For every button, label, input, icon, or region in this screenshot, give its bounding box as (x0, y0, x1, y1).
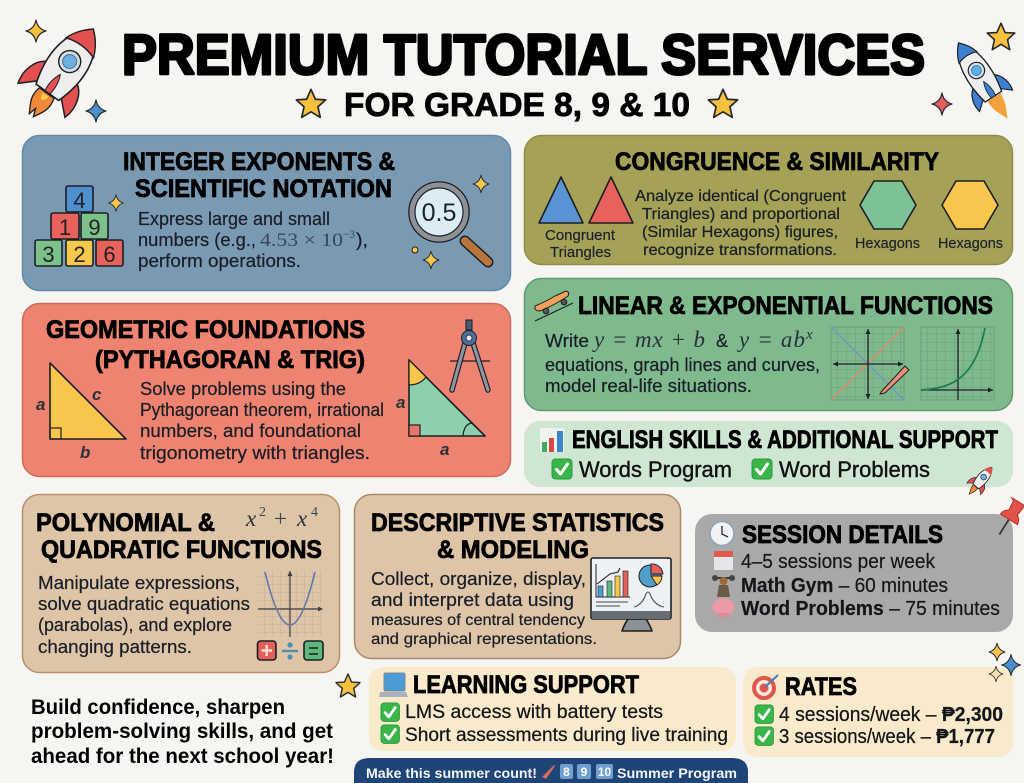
icon: push pin (991, 497, 1024, 540)
text: polynomial description: Manipulate expressions, (38, 573, 240, 593)
icon: rocket right (941, 32, 1024, 130)
text: congruence description: Analyze identical (Congruent (635, 188, 847, 205)
text: linear description: & (716, 331, 728, 351)
formula: x squared plus x to the fourth: 4 (311, 505, 318, 520)
text: congruence description: Triangles) and proportional (642, 206, 840, 223)
text: closing message: Build confidence, sharpen (31, 696, 285, 719)
text: linear description: y = mx + b (592, 327, 705, 352)
icon: congruent triangles (539, 177, 633, 261)
icon: bar chart (540, 428, 564, 452)
formula: x squared plus x to the fourth: x (296, 506, 308, 531)
heading: integer exponents: INTEGER EXPONENTS & (123, 148, 395, 176)
item: word problems time: Word Problems – 75 minutes (741, 598, 1000, 620)
chart: exponential graph (921, 327, 994, 400)
icon: computer monitor with charts (591, 558, 671, 631)
icon: subtitle star right (708, 89, 738, 117)
panel: polynomial and quadratic functions (22, 494, 340, 672)
heading: geometric foundations (46, 316, 365, 374)
banner: summer program: Summer Program (617, 765, 737, 781)
icon: green hexagon (855, 181, 920, 252)
icon: sparkle red right (932, 93, 952, 115)
icon: math operation symbols (258, 641, 323, 660)
icon: green hexagon: Hexagons (855, 235, 920, 252)
panel: english skills (524, 421, 1013, 500)
item: math gym: Math Gym – 60 minutes (741, 575, 948, 597)
item: short assessments: Short assessments during live training (405, 724, 728, 746)
panel: descriptive statistics (354, 494, 680, 658)
heading: descriptive statistics: DESCRIPTIVE STATISTICS (371, 509, 664, 537)
icon: subtitle star left (296, 89, 326, 117)
heading: descriptive statistics (371, 509, 664, 564)
icon: clock (710, 522, 734, 546)
text: closing message: problem-solving skills, and get (31, 720, 333, 743)
text: linear description: Write (545, 331, 589, 351)
banner: summer program (354, 758, 748, 783)
text: geometric description (140, 379, 384, 463)
icon: yellow hexagon (938, 181, 1003, 252)
icon: number blocks: 4 (73, 188, 86, 213)
icon: green right triangle: a (396, 393, 405, 412)
icon: congruent triangles: Congruent (545, 227, 616, 244)
heading: geometric foundations: GEOMETRIC FOUNDATIONS (46, 316, 365, 344)
text: integer exponents description: −3 (343, 227, 355, 241)
text: statistics description: and graphical representations. (371, 631, 597, 648)
heading: integer exponents: SCIENTIFIC NOTATION (135, 175, 392, 203)
text: congruence description (635, 188, 847, 259)
icon: sparkle blue left (86, 100, 106, 122)
icon: magnifying glass: 0.5 (422, 199, 456, 227)
banner: summer program: 9 (581, 765, 588, 779)
text: polynomial description: changing patterns. (38, 637, 192, 657)
icon: yellow right triangle (36, 363, 126, 462)
text: statistics description: measures of central tendency (371, 612, 585, 629)
icon: number blocks: 1 (59, 215, 71, 240)
icon: number blocks: 6 (103, 242, 116, 267)
heading: geometric foundations: (PYTHAGORAN & TRIG) (95, 346, 365, 374)
text: statistics description: and interpret data using (371, 590, 574, 610)
item: three sessions rate: 3 sessions/week – ₱1,777 (779, 726, 995, 748)
heading: congruence and similarity: CONGRUENCE & SIMILARITY (615, 148, 939, 176)
heading: polynomial and quadratic (36, 509, 322, 564)
icon: yellow right triangle: c (92, 385, 102, 404)
icon: sparkle cluster bottom right (989, 643, 1020, 682)
text: integer exponents description: ), (356, 230, 368, 250)
text: linear description: x (805, 327, 813, 343)
banner: summer program: 8 (563, 765, 570, 779)
icon: skateboard on slope (535, 291, 573, 321)
panel: linear and exponential functions (524, 278, 1012, 410)
text: integer exponents description: 4.53 × 10 (260, 230, 343, 251)
text: closing message (31, 696, 334, 768)
text: geometric description: numbers, and foundational (140, 421, 361, 441)
panel: congruence and similarity (524, 136, 1012, 264)
icon: star near learning support (336, 674, 360, 697)
text: statistics description: Collect, organize, display, (371, 569, 586, 589)
icon: number blocks: 9 (88, 215, 101, 240)
text: congruence description: (Similar Hexagons) figures, (642, 224, 838, 241)
banner: summer program: 10 (598, 765, 611, 779)
heading: polynomial and quadratic: QUADRATIC FUNCTIONS (41, 536, 322, 564)
icon: sparkle yellow top left (26, 20, 46, 42)
text: integer exponents description (138, 209, 368, 271)
text: closing message: ahead for the next school year! (31, 745, 334, 768)
heading: session details: SESSION DETAILS (742, 521, 943, 549)
heading: polynomial and quadratic: POLYNOMIAL & (36, 509, 215, 537)
icon: number blocks: 2 (73, 242, 86, 267)
text: statistics description (371, 569, 597, 648)
text: geometric description: trigonometry with triangles. (140, 443, 370, 463)
icon: magnifying glass (409, 175, 489, 269)
icon: yellow hexagon: Hexagons (938, 235, 1003, 252)
icon: rocket left (6, 11, 118, 133)
icon: congruent triangles: Triangles (550, 244, 611, 261)
text: geometric description: Solve problems using the (140, 379, 346, 399)
icon: drawing compass (450, 320, 490, 390)
chart: parabola graph (258, 571, 323, 637)
text: linear description: y = ab (737, 327, 805, 352)
subtitle: FOR GRADE 8, 9 & 10 (344, 86, 690, 123)
icon: target (752, 675, 778, 700)
banner: summer program: Make this summer count! (366, 765, 537, 781)
heading: rates: RATES (785, 673, 857, 701)
icon: green right triangle: a (440, 440, 449, 459)
text: congruence description: recognize transformations. (643, 242, 837, 259)
icon: laptop (379, 673, 408, 697)
formula: x squared plus x to the fourth (245, 505, 318, 531)
text: polynomial description: (parabolas), and explore (38, 615, 232, 635)
icon: number blocks (35, 186, 124, 267)
item: sessions per week: 4–5 sessions per week (741, 551, 936, 573)
text: linear description (545, 327, 820, 396)
text: linear description: equations, graph lines and curves, (545, 355, 820, 375)
icon: yellow right triangle: b (80, 443, 90, 462)
panel: learning support (369, 667, 736, 751)
panel: rates (743, 667, 1013, 757)
text: linear description: model real-life situations. (545, 376, 752, 396)
text: geometric description: Pythagorean theorem, irrational (140, 400, 384, 420)
item: word problems: Word Problems (779, 457, 930, 482)
title: PREMIUM TUTORIAL SERVICES (122, 23, 925, 87)
heading: learning support: LEARNING SUPPORT (413, 671, 639, 699)
text: integer exponents description: perform operations. (138, 251, 301, 271)
text: polynomial description: solve quadratic equations (38, 594, 250, 614)
icon: number blocks: 3 (42, 242, 55, 267)
panel: integer exponents (22, 136, 510, 290)
item: words program: Words Program (579, 457, 732, 482)
chart: linear graph (831, 327, 909, 400)
text: integer exponents description: Express large and small (138, 209, 330, 229)
icon: small rocket (962, 461, 999, 500)
icon: green right triangle (396, 360, 485, 459)
formula: x squared plus x to the fourth: 2 (259, 505, 266, 520)
heading: integer exponents (123, 148, 395, 203)
item: LMS access: LMS access with battery tests (405, 701, 663, 723)
icon: yellow right triangle: a (36, 395, 45, 414)
text: polynomial description (38, 573, 250, 657)
formula: x squared plus x to the fourth: x (245, 506, 257, 531)
heading: descriptive statistics: & MODELING (437, 536, 589, 564)
item: four sessions rate: 4 sessions/week – ₱2,300 (779, 704, 1003, 726)
icon: star top right (987, 23, 1015, 50)
panel: geometric foundations (22, 304, 510, 476)
panel: session details (695, 497, 1024, 632)
formula: x squared plus x to the fourth: + (274, 506, 287, 531)
text: integer exponents description: numbers (e.g., (138, 230, 256, 250)
heading: linear and exponential functions: LINEAR & EXPONENTIAL FUNCTIONS (578, 292, 993, 320)
